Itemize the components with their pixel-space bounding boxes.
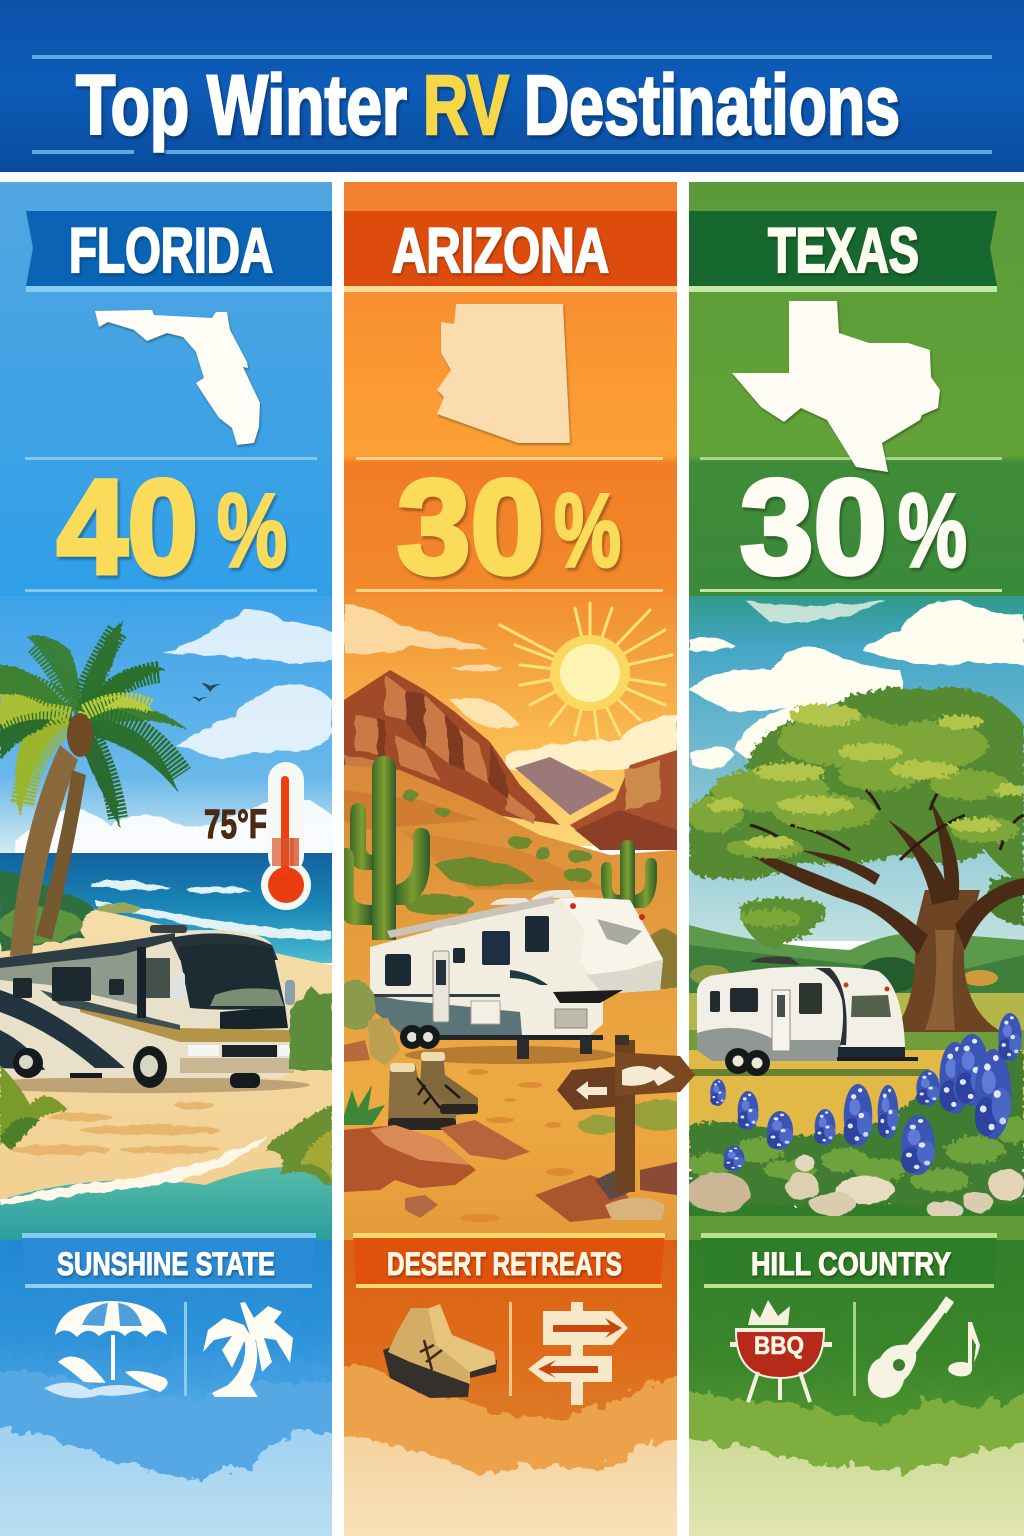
sun [500, 603, 672, 740]
icon: palm tree [203, 1302, 293, 1397]
icon: beach umbrella and chair [44, 1301, 168, 1398]
Florida ribbon [26, 211, 332, 292]
oak tree [687, 688, 1024, 1032]
Florida heading: FLORIDA [69, 216, 273, 286]
panel: Arizona [344, 182, 677, 1536]
Texas state map [732, 301, 940, 472]
title: Top Winter [76, 58, 407, 152]
rocks left [344, 1120, 530, 1218]
fifth wheel trailer [370, 890, 663, 1064]
sand streaks [10, 1102, 220, 1155]
clouds [689, 600, 1024, 780]
hiking boots [388, 1052, 478, 1130]
Desert Retreats label: DESERT RETREATS [387, 1246, 622, 1282]
agave [344, 1085, 385, 1125]
palm fronds [0, 620, 188, 828]
BBQ lettering: BBQ [754, 1332, 804, 1360]
Florida state map [95, 310, 260, 445]
Florida percent: % [217, 473, 287, 589]
sea [0, 853, 332, 963]
desert slope and ground [344, 765, 677, 1240]
clouds [344, 603, 677, 770]
desert scene [335, 596, 690, 1240]
Florida percent [56, 476, 290, 581]
Texas percent: 30 [740, 453, 887, 602]
small saguaro [601, 840, 657, 910]
canyon cliffs [344, 670, 560, 825]
trunk [890, 890, 1002, 1032]
Texas heading: TEXAS [768, 216, 919, 286]
Texas ribbon [689, 211, 997, 292]
Texas percent: % [898, 473, 967, 589]
bush right [290, 985, 332, 1070]
icon: guitar and music note [868, 1296, 980, 1398]
Arizona percent [397, 476, 624, 582]
Arizona percent: % [554, 473, 621, 589]
dunes foliage [0, 870, 140, 950]
tropical plants [0, 1065, 332, 1185]
bluebonnets [710, 1013, 1022, 1175]
motorhome [0, 925, 310, 1093]
header band [0, 0, 1024, 172]
wildflower foliage [688, 1050, 1024, 1205]
icon: BBQ grill [730, 1300, 832, 1402]
panel: Florida [0, 182, 332, 1536]
foreground grass [689, 1216, 1024, 1240]
stones [686, 1155, 1024, 1219]
distant mountain [515, 757, 615, 815]
Sunshine State label: SUNSHINE STATE [57, 1246, 275, 1282]
boulders by the cactus [335, 980, 400, 1066]
hill country scene [686, 596, 1024, 1240]
rocks right [535, 1162, 677, 1222]
foliage mass [689, 688, 1024, 948]
Hill Country label: HILL COUNTRY [751, 1246, 951, 1282]
title [76, 58, 900, 152]
foliage highlights [687, 704, 1024, 927]
sand [0, 909, 332, 1200]
Arizona heading: ARIZONA [392, 216, 609, 286]
saguaro [338, 756, 430, 940]
palm coconuts [67, 713, 93, 757]
clouds [15, 609, 332, 856]
meadow [689, 993, 1024, 1053]
birds [192, 683, 221, 702]
icon: thermometer [261, 762, 311, 910]
title: Destinations [524, 58, 900, 152]
Texas percent [740, 453, 967, 602]
green hills [689, 925, 1024, 1000]
lagoon [0, 1167, 332, 1240]
palm trunks [10, 745, 86, 956]
Arizona ribbon [344, 211, 677, 292]
temperature label: 75°F [204, 801, 267, 847]
sand flecks [460, 1069, 574, 1222]
Arizona percent: 30 [397, 453, 544, 602]
Florida percent: 40 [57, 453, 198, 602]
icon: trail signpost [528, 1302, 628, 1405]
Sunshine State ribbon [22, 1233, 316, 1288]
icon: hiking boots [383, 1304, 497, 1398]
Arizona state map [437, 304, 570, 443]
Desert Retreats ribbon [353, 1233, 665, 1288]
Hill Country ribbon [701, 1233, 997, 1288]
arrow signpost [557, 1035, 695, 1192]
shrubs [402, 789, 690, 1135]
panel: Texas [649, 182, 1024, 1536]
beach scene [0, 596, 332, 1240]
limbs [735, 800, 1024, 955]
temperature callout [204, 762, 311, 910]
title: RV [423, 58, 509, 152]
travel trailer [697, 957, 918, 1076]
